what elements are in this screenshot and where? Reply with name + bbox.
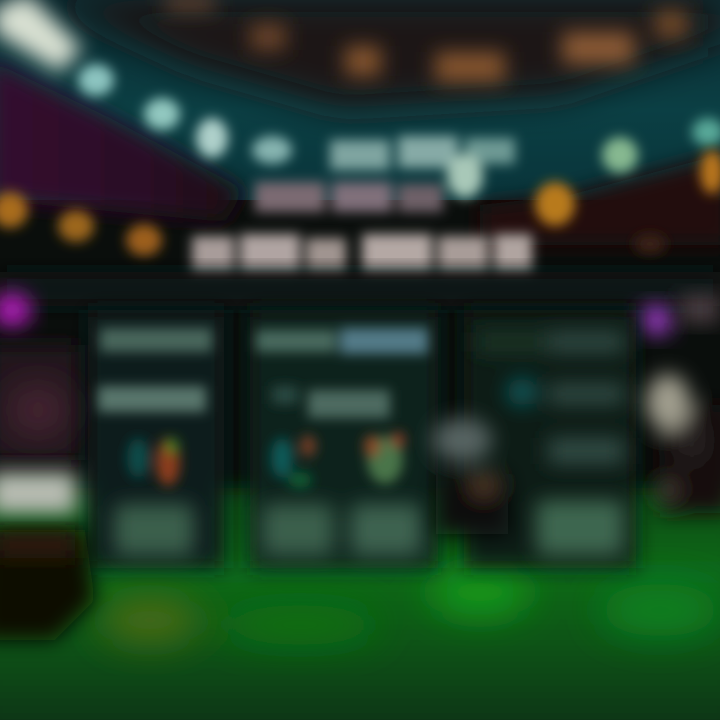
white roof lights (0, 0, 720, 173)
panel heading text (256, 328, 428, 418)
button (536, 500, 624, 556)
figure: centre player (432, 418, 508, 534)
dark red stand on right (480, 150, 720, 245)
background: teal stadium roof (0, 0, 720, 200)
grass highlights (100, 568, 720, 645)
purple side lights (0, 292, 720, 336)
figure: right player (646, 374, 720, 513)
orange lights (0, 150, 720, 256)
icon: colourful emblem (127, 438, 180, 486)
panel: right column (464, 310, 636, 568)
title block: blurred heading text (192, 136, 532, 274)
grass field (0, 488, 720, 720)
row of upper stadium lights (165, 0, 687, 82)
panel: centre column (250, 310, 438, 568)
panel: left column (88, 310, 224, 568)
left side screen (0, 345, 95, 640)
panel heading text (98, 328, 212, 412)
dark horizontal stand band (0, 272, 720, 306)
icon: colourful emblems (271, 432, 405, 488)
purple stand wedge (0, 60, 245, 222)
buttons (262, 504, 422, 556)
button (114, 504, 194, 556)
panel text lines (476, 332, 624, 464)
